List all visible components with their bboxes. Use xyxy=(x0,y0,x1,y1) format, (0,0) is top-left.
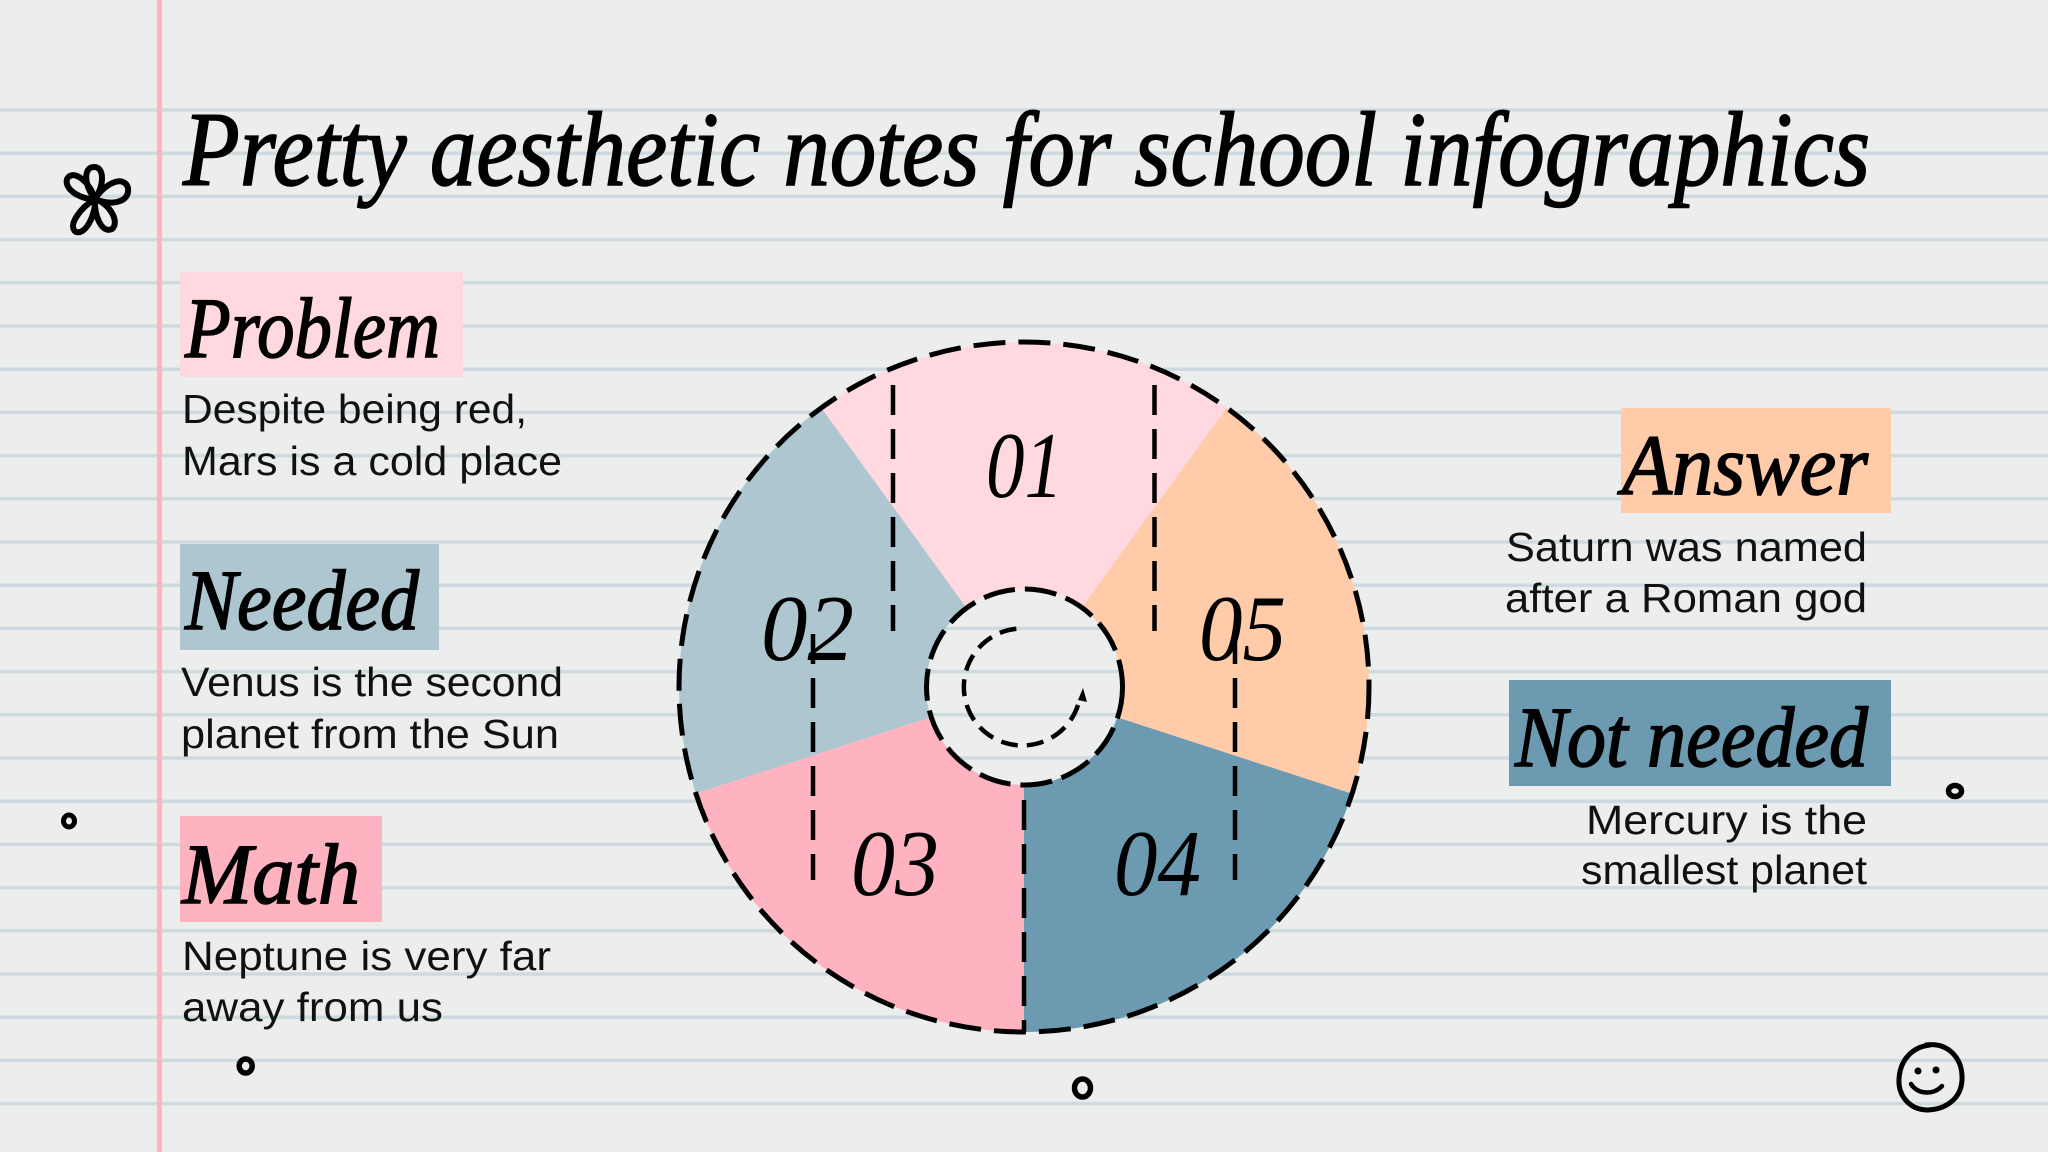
text block: math: away from us xyxy=(182,984,443,1030)
heading: answer: Answer xyxy=(1617,417,1869,513)
outer dashed ring xyxy=(679,342,1369,1032)
decorative dot: bottom centre xyxy=(1074,1079,1090,1097)
panel: math xyxy=(180,816,551,1030)
heading highlight: not needed xyxy=(1509,680,1891,786)
heading highlight: answer xyxy=(1621,408,1891,513)
panel: not needed xyxy=(1509,680,1891,893)
heading highlight: problem xyxy=(180,272,463,377)
text block: answer xyxy=(1505,524,1867,621)
dashed divider lines xyxy=(813,385,1235,1032)
heading: not needed: Not needed xyxy=(1514,689,1869,785)
icon: flower xyxy=(67,167,128,232)
text block: math xyxy=(182,933,551,1030)
panel: answer xyxy=(1505,408,1891,621)
heading: math: Math xyxy=(180,826,360,922)
decorative dot: lower left xyxy=(239,1059,252,1073)
icon: circular arrow xyxy=(964,628,1087,745)
heading highlight: needed xyxy=(180,544,439,650)
heading: problem: Problem xyxy=(184,280,440,376)
text block: not needed: smallest planet xyxy=(1581,847,1868,893)
label 02: 02 xyxy=(761,577,854,681)
inner dashed ring xyxy=(926,589,1122,785)
text block: math: Neptune is very far xyxy=(182,933,551,979)
label 03: 03 xyxy=(851,812,939,916)
notebook margin line xyxy=(157,0,162,1152)
text block: answer: after a Roman god xyxy=(1505,575,1867,621)
text block: not needed: Mercury is the xyxy=(1586,797,1867,843)
segment 03 xyxy=(696,717,1024,1032)
segment 02 xyxy=(679,408,966,794)
icon: smiley xyxy=(1899,1045,1962,1110)
decorative dot: right xyxy=(1948,786,1962,796)
segment 04 xyxy=(1024,717,1352,1032)
text block: problem: Mars is a cold place xyxy=(182,438,562,484)
heading highlight: math xyxy=(180,816,382,922)
donut chart xyxy=(679,342,1369,1032)
text block: needed: Venus is the second xyxy=(181,659,563,705)
text block: answer: Saturn was named xyxy=(1506,524,1867,570)
text block: needed xyxy=(181,659,563,757)
panel: problem xyxy=(180,272,562,484)
text block: needed: planet from the Sun xyxy=(181,711,559,757)
decorative dot: left margin xyxy=(64,815,74,827)
label 04: 04 xyxy=(1114,812,1201,916)
segment 05 xyxy=(1082,408,1369,794)
text block: not needed xyxy=(1581,797,1868,893)
segment 01 xyxy=(821,342,1227,608)
text block: problem xyxy=(182,386,562,484)
panel: needed xyxy=(180,544,563,757)
label 05: 05 xyxy=(1199,577,1286,681)
text block: problem: Despite being red, xyxy=(182,386,527,432)
heading: needed: Needed xyxy=(184,552,420,648)
label 01: 01 xyxy=(986,414,1063,518)
